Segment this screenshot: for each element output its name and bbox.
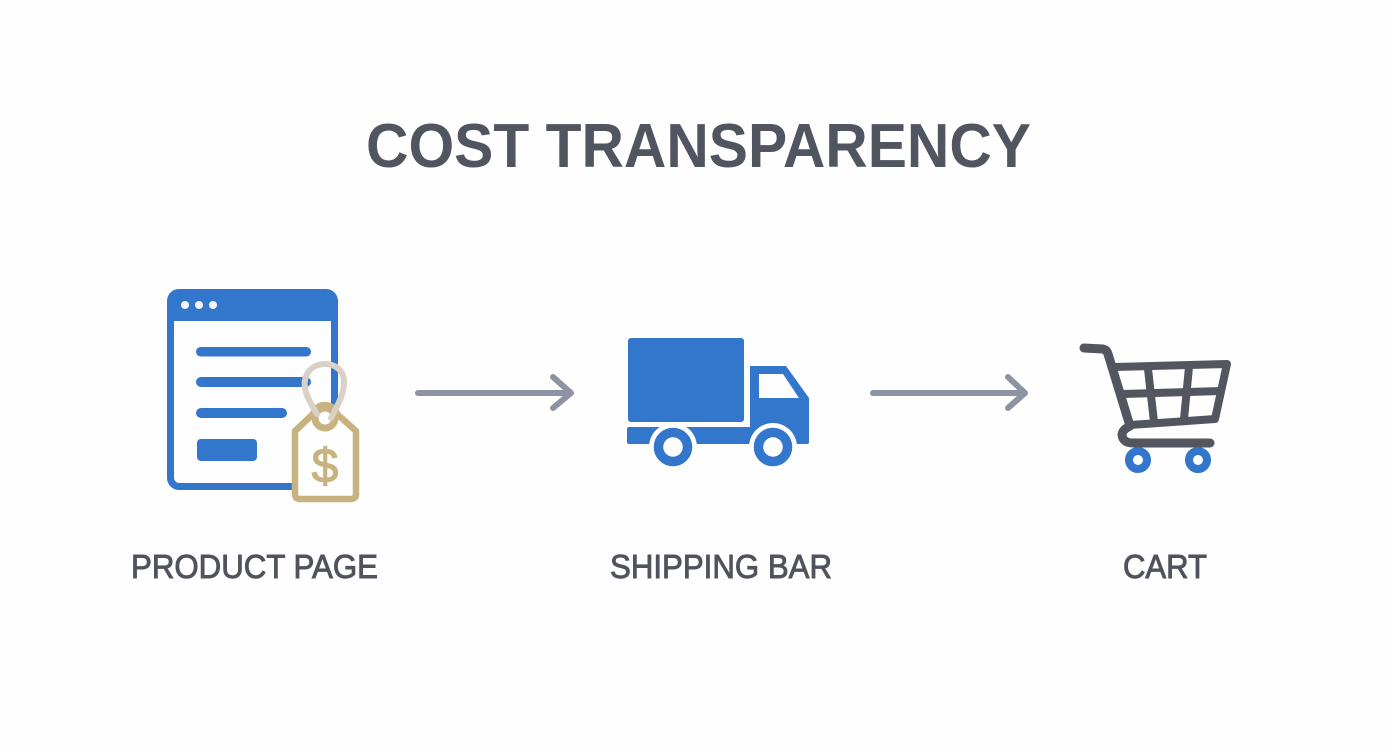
icon: shopping cart — [1084, 348, 1227, 469]
price tag: $ — [312, 440, 338, 493]
arrow: product page to shipping bar — [418, 377, 571, 408]
arrow: shipping bar to cart — [873, 377, 1025, 408]
label: shipping bar: SHIPPING BAR — [610, 548, 832, 585]
icon: product page with price tag — [167, 289, 356, 499]
front and rear wheels — [649, 423, 797, 471]
label: product page: PRODUCT PAGE — [131, 548, 378, 585]
price tag — [295, 364, 356, 499]
browser window — [167, 289, 338, 490]
title: COST TRANSPARENCY — [366, 112, 1031, 181]
icon: delivery truck — [627, 338, 809, 471]
label: cart: CART — [1123, 548, 1207, 585]
cart wheels — [1129, 451, 1207, 469]
